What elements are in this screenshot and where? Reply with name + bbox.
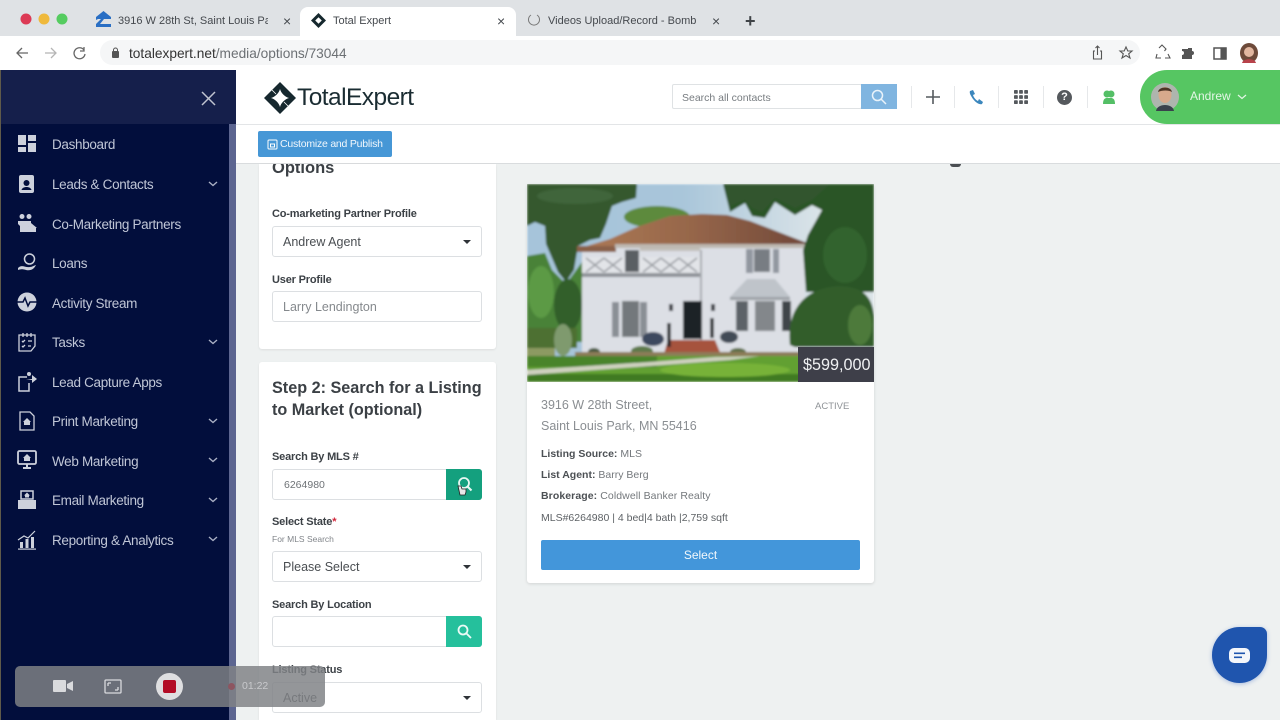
label: tasks: Tasks [52, 335, 85, 350]
label: mls: Search By MLS # [272, 451, 359, 463]
label: activity: Activity Stream [52, 296, 137, 311]
icon: screen [104, 679, 122, 694]
label: reporting: Reporting & Analytics [52, 533, 173, 548]
tudor band [582, 257, 700, 273]
sidebar close icon [202, 92, 216, 106]
icon: reporting [18, 530, 36, 550]
lower left window [612, 302, 619, 337]
button label: Customize and Publish [280, 138, 383, 150]
label: email: Email Marketing [52, 493, 144, 508]
search contacts [672, 84, 897, 109]
customize and publish button [258, 131, 392, 157]
distant tree [624, 206, 690, 228]
url: totalexpert.net/media/options/73044 [129, 46, 347, 61]
logo wordmark: TotalExpert [297, 84, 414, 111]
icon: plus [926, 90, 940, 104]
label: loans: Loans [52, 256, 87, 271]
icon: save [268, 140, 278, 150]
mulch [575, 352, 800, 358]
sidebar scrollbar [229, 124, 236, 720]
browser toolbar icons [1092, 44, 1227, 60]
select button [541, 540, 860, 570]
placeholder: Search all contacts [682, 92, 771, 104]
header separators [911, 86, 912, 108]
value: 6264980 [284, 479, 325, 491]
chat widget [1212, 627, 1267, 683]
tab close: × [497, 13, 505, 29]
icon: help [1057, 90, 1072, 105]
select: listing status [272, 682, 482, 713]
browser profile avatar [1240, 43, 1258, 63]
sidebar header [0, 70, 236, 124]
icon: email [18, 490, 36, 509]
house wall [582, 248, 805, 354]
brokerage: Brokerage: Coldwell Banker Realty [541, 490, 711, 502]
icon: phone [970, 90, 983, 104]
navigation arrows [16, 47, 86, 60]
value: Active [283, 691, 317, 705]
icon: zillow [96, 11, 111, 27]
bay window roof [730, 279, 790, 297]
label: state: Select State* [272, 516, 336, 528]
user chevron [1238, 94, 1246, 100]
label: print: Print Marketing [52, 414, 138, 429]
action bar [236, 125, 1280, 164]
address: Saint Louis Park, MN 55416 [541, 418, 697, 432]
steps [663, 340, 722, 357]
tab: videos [528, 13, 720, 29]
input: user profile [272, 291, 482, 322]
page heading fragment [950, 164, 961, 167]
address bar [100, 40, 1140, 65]
icon: dashboard [18, 135, 36, 152]
label: listing status: Listing Status [272, 664, 342, 676]
icon: chat [1229, 648, 1250, 663]
hedge bush [789, 286, 874, 347]
label: lead capture: Lead Capture Apps [52, 375, 162, 390]
right trees [723, 184, 874, 292]
menu item: leads [19, 175, 34, 193]
window traffic lights [20, 14, 68, 24]
icon: apps grid [1014, 90, 1028, 104]
heading: step 2: to Market (optional) [272, 401, 422, 419]
icon: help: ? [1061, 91, 1068, 103]
label: location: Search By Location [272, 599, 371, 611]
roof [577, 214, 807, 252]
front path [527, 356, 760, 375]
user menu pill [1140, 70, 1280, 124]
icon: contacts [1103, 90, 1115, 104]
select: state [272, 551, 482, 582]
app header [236, 70, 1280, 125]
sidebar [0, 70, 236, 720]
stop square [163, 680, 176, 693]
tab strip [0, 0, 1280, 36]
input: mls search [272, 469, 482, 500]
icon: logo mark [264, 82, 296, 114]
tab: total expert active [300, 7, 516, 36]
menu chevrons [208, 182, 218, 542]
icon: loans [18, 253, 36, 270]
tab close: × [712, 13, 720, 29]
mls search button [446, 469, 482, 500]
icon: print [19, 411, 35, 431]
logo [264, 82, 414, 114]
tab title: Total Expert [333, 15, 391, 27]
label: partner profile: Co-marketing Partner Profile [272, 208, 417, 220]
new tab plus: + [745, 11, 756, 31]
search field [672, 84, 862, 109]
location search button [446, 616, 482, 647]
status: ACTIVE [815, 401, 849, 412]
panel: step 2 [259, 362, 496, 720]
value: Andrew Agent [283, 235, 361, 249]
left bushes [527, 253, 582, 342]
caret [463, 240, 471, 244]
boxwoods [642, 332, 664, 346]
mls details: MLS#6264980 | 4 bed|4 bath |2,759 sqft [541, 512, 728, 524]
stop record button [156, 673, 183, 700]
browser chrome [0, 0, 1280, 70]
icon: camera [53, 679, 73, 693]
icon: web [17, 450, 37, 469]
icon: partners [18, 214, 37, 232]
icon: activity [18, 292, 36, 312]
price: $599,000 [803, 356, 871, 374]
icon: lock [112, 48, 119, 58]
icon: magnifier [458, 624, 472, 639]
icon: tasks [18, 333, 36, 352]
tab close: × [283, 13, 291, 29]
heading: step 2: Step 2: Search for a Listing [272, 379, 482, 397]
recording dot [228, 683, 235, 690]
search button [861, 84, 897, 109]
heading: step 2 [272, 379, 482, 419]
label: user profile: User Profile [272, 274, 332, 286]
icon: loading [528, 14, 540, 26]
input: location search [272, 616, 482, 647]
lawn [527, 356, 874, 382]
label: partners: Co-Marketing Partners [52, 217, 181, 232]
icon: magnifier and cursor [458, 477, 472, 496]
listing card [527, 184, 874, 583]
value: Larry Lendington [283, 300, 377, 314]
label: leads: Leads & Contacts [52, 177, 153, 192]
house photo [527, 184, 874, 382]
caret [463, 565, 471, 569]
user avatar [1151, 83, 1179, 111]
window edge line [0, 70, 1, 720]
door [683, 301, 702, 339]
icon: magnifier [872, 90, 886, 104]
list agent: List Agent: Barry Berg [541, 469, 649, 481]
upper windows [625, 250, 639, 272]
timer: 01:22 [242, 680, 268, 692]
panel: options [259, 164, 496, 349]
label: dashboard: Dashboard [52, 137, 115, 152]
tab: listing [96, 11, 291, 29]
icon: total expert favicon [311, 13, 326, 28]
user name: Andrew [1190, 89, 1231, 103]
menu item: dashboard [18, 135, 36, 152]
icon: lead capture [18, 372, 37, 392]
select: partner [272, 226, 482, 257]
address [541, 395, 781, 437]
listing source: Listing Source: MLS [541, 448, 642, 460]
value: Please Select [283, 560, 359, 574]
left tree canopy [527, 184, 637, 282]
recorder toolbar [15, 666, 325, 707]
address: 3916 W 28th Street, [541, 398, 652, 412]
price tag [798, 347, 874, 382]
caret [463, 696, 471, 700]
helper: mls search: For MLS Search [272, 534, 334, 544]
label: web: Web Marketing [52, 454, 138, 469]
select button: Select [684, 548, 717, 562]
